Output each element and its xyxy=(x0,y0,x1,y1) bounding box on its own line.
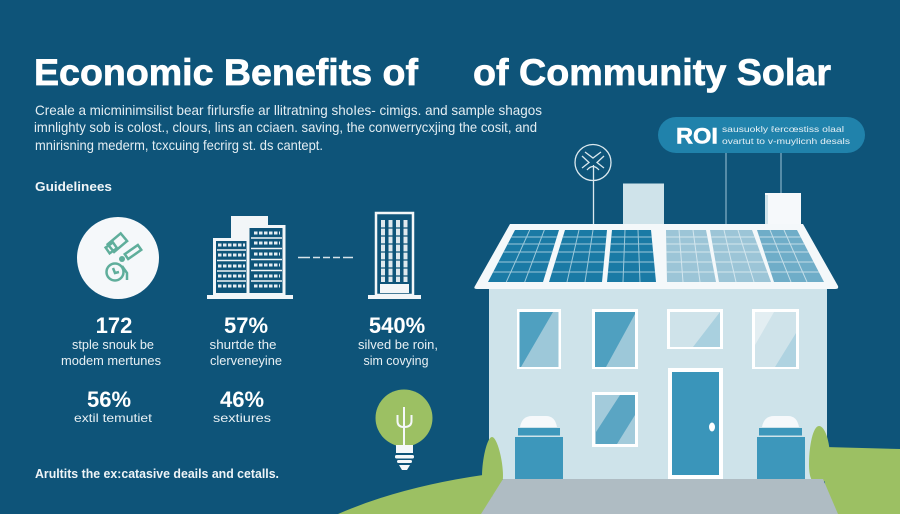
solar panel 4 xyxy=(666,230,716,282)
stat: 57%: shurtde the xyxy=(210,338,277,352)
stat: 172 xyxy=(61,313,161,368)
stat: 56% xyxy=(74,387,153,425)
stat: 46% xyxy=(213,387,271,425)
stat: 540% xyxy=(358,313,438,368)
intro text block: mnirisning mederm, tcxcuing fecrirg st. ds cantept. xyxy=(35,137,323,153)
pavement xyxy=(481,479,838,514)
title: Economic Benefits of xyxy=(34,52,419,93)
stat: 57%: 57% xyxy=(224,313,268,338)
chimney left xyxy=(623,184,664,224)
stat: 540%: silved be roin, xyxy=(358,338,438,352)
stat: 57%: clerveneyine xyxy=(210,354,282,368)
chimney right xyxy=(765,193,801,224)
callout: ROI: sausuokly ℓercœstiss olaal xyxy=(722,124,844,134)
stat: 56%: extil temutiet xyxy=(74,411,153,425)
solar panel 1 xyxy=(488,230,559,282)
window 2 xyxy=(592,309,638,369)
lawn lower right xyxy=(820,470,900,514)
stat: 540%: sim covying xyxy=(364,354,429,368)
stat: 172: modem mertunes xyxy=(61,354,161,368)
intro text block: Creale a micminimsilist bear firlursfie ar llitratning shoIes- cimigs. and sample shagos xyxy=(35,102,542,118)
antenna icon xyxy=(575,144,611,224)
stat: 540%: 540% xyxy=(369,313,425,338)
right planter xyxy=(757,416,805,479)
heading: guidelines: Guidelinees xyxy=(35,179,112,194)
callout: ROI xyxy=(658,117,865,224)
building facade xyxy=(489,285,827,479)
stat: 172: 172 xyxy=(96,313,132,338)
icon: money circle xyxy=(77,217,159,299)
stat: 172: stple snouk be xyxy=(72,338,154,352)
dashed connector xyxy=(298,256,353,258)
stat: 57% xyxy=(210,313,282,368)
callout: ROI: ovartut to v-muylicnh desals xyxy=(722,136,850,146)
lawn right xyxy=(825,447,900,514)
footer note: Arultits the ex:catasive deails and cetalls. xyxy=(35,466,279,481)
shrub left xyxy=(482,437,503,496)
title xyxy=(34,52,831,93)
solar panel 6 xyxy=(757,230,824,282)
window 5 xyxy=(592,392,638,447)
solar panel 5 xyxy=(710,230,771,282)
roof xyxy=(474,224,838,289)
solar panel 2 xyxy=(549,230,607,282)
icon: light bulb xyxy=(376,390,432,470)
window 4 xyxy=(752,309,799,369)
icon: office buildings xyxy=(207,216,293,299)
window 1 xyxy=(517,309,561,369)
intro text block: imnlighty sob is colost., clours, lins an cciaen. saving, the conwerrycxjing the cosit, and xyxy=(34,119,537,135)
callout: ROI: ROI xyxy=(676,124,718,148)
shrub right xyxy=(809,426,830,484)
intro text block xyxy=(34,102,542,153)
window 3 xyxy=(667,309,723,349)
left planter xyxy=(515,416,563,479)
stat: 46%: sextiures xyxy=(213,411,271,425)
title: of Community Solar xyxy=(473,52,831,93)
stat: 46%: 46% xyxy=(220,387,264,412)
lawn left xyxy=(338,475,500,514)
solar panel 3 xyxy=(607,230,656,282)
door xyxy=(668,368,723,479)
stat: 56%: 56% xyxy=(87,387,131,412)
icon: tower xyxy=(368,213,421,299)
